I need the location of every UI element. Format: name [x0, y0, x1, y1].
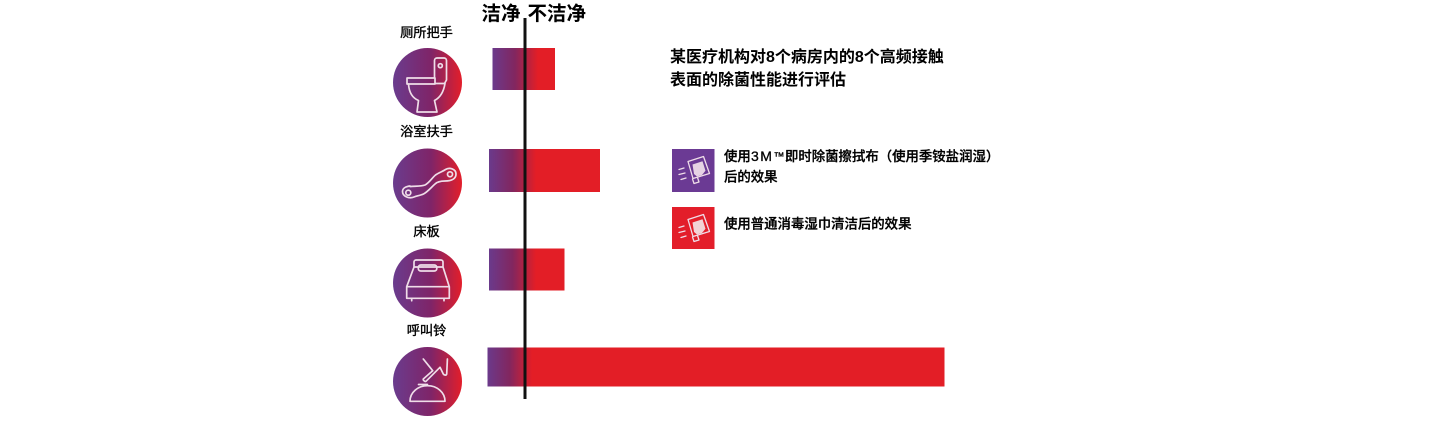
label: call bell: 呼叫铃 — [407, 323, 446, 338]
icon: toilet — [393, 48, 462, 117]
bar: toilet handle — [492, 48, 555, 90]
title text: 表面的除菌性能进行评估 — [670, 70, 846, 89]
legend text: 3M wipe — [724, 148, 999, 184]
legend text: 3M wipe: 即时除菌擦拭布（使用季铵盐润湿） — [785, 148, 999, 164]
axis line — [524, 18, 526, 399]
legend text: 3M wipe: 使用 — [724, 149, 751, 164]
legend icon: 3M wipe — [672, 149, 714, 192]
title text: 某医疗机构对8个病房内的8个高频接触 — [670, 47, 944, 66]
legend text: 3M wipe: ™ — [774, 151, 784, 163]
icon: call bell — [393, 347, 462, 416]
bar: bathroom grab rail — [489, 149, 600, 192]
title text — [670, 47, 944, 89]
legend icon: ordinary wipe — [672, 207, 714, 249]
icon: bed — [393, 248, 462, 318]
legend text: 3M wipe: 3M — [751, 148, 773, 164]
heading: not clean: 不洁净 — [528, 3, 586, 25]
label: toilet handle: 厕所把手 — [400, 25, 453, 40]
bar: call bell — [488, 348, 944, 386]
legend text: ordinary wipe: 使用普通消毒湿巾清洁后的效果 — [724, 216, 911, 232]
label: bed board: 床板 — [413, 224, 440, 239]
icon: grab rail — [393, 148, 462, 218]
heading: clean: 洁净 — [482, 3, 521, 25]
label: bathroom grab rail: 浴室扶手 — [400, 123, 453, 139]
bar: bed board — [489, 248, 564, 290]
legend text: 3M wipe: 后的效果 — [724, 168, 778, 184]
